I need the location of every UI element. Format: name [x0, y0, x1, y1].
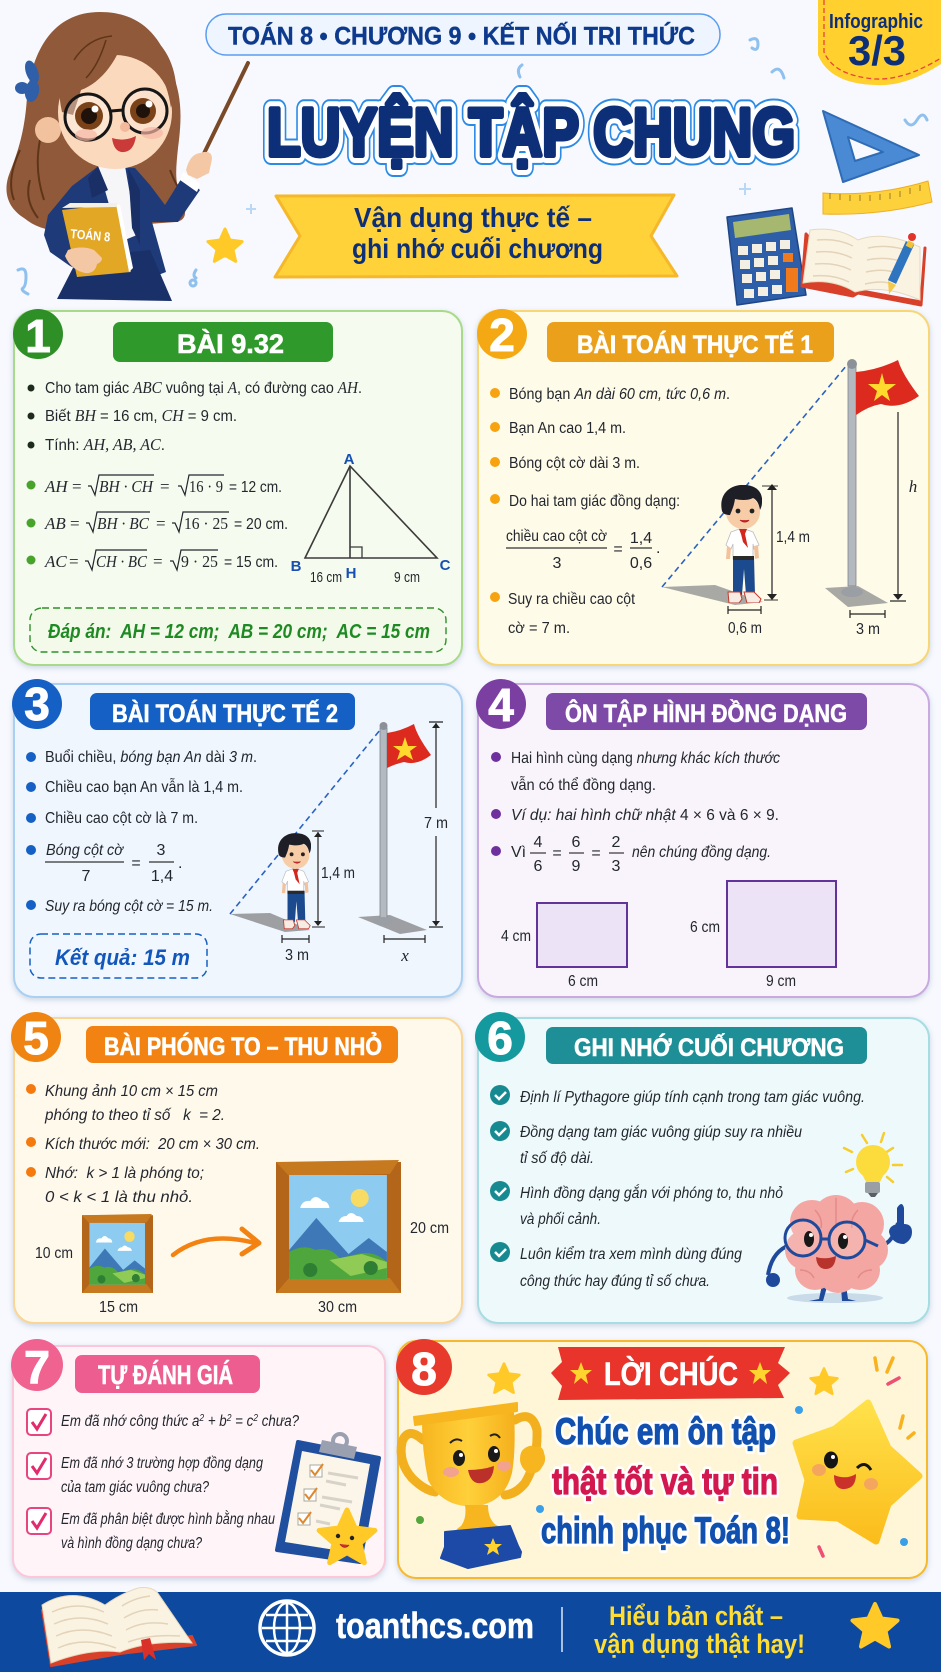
checklist — [490, 1085, 865, 1290]
rectangle 4 × 6: 6 cm — [568, 973, 598, 990]
result box: Kết quả: 15 m — [55, 945, 190, 970]
panel 2: Bài toán thực tế 1 — [477, 309, 929, 665]
panel 3: Bài toán thực tế 2 — [12, 678, 462, 997]
diagram: boy, flagpole and shadows: 1,4 m — [776, 529, 810, 546]
icon: light bulb — [844, 1133, 902, 1197]
icon: globe — [260, 1601, 314, 1655]
formulas: 9 · 25 — [181, 552, 218, 571]
checklist: Luôn kiểm tra xem mình dùng đúng — [520, 1245, 742, 1263]
checklist: = c — [231, 1413, 253, 1430]
title: LUYỆN TẬP CHUNG — [267, 94, 795, 170]
heading: TỰ ĐÁNH GIÁ — [98, 1359, 233, 1390]
checklist: và hình đồng dạng chưa? — [61, 1535, 202, 1552]
diagram: boy, flagpole and shadows — [230, 722, 448, 965]
triangle ABC: B — [291, 558, 302, 575]
result box — [30, 934, 207, 978]
rectangle 6 × 9: 9 cm — [766, 973, 796, 990]
formulas: = — [153, 552, 163, 571]
subject pill — [206, 14, 720, 55]
text list: = — [613, 541, 623, 558]
panel 1: Bài 9.32 — [13, 309, 462, 665]
icon: open book — [42, 1588, 196, 1666]
checklist: chưa? — [258, 1413, 299, 1430]
ribbon heading — [551, 1347, 790, 1400]
badge 1 — [13, 309, 63, 362]
tagline — [594, 1601, 805, 1659]
checklist: của tam giác vuông chưa? — [61, 1479, 209, 1496]
formulas: = — [156, 514, 166, 533]
icon: clipboard with star — [277, 1434, 379, 1563]
star decoration — [489, 1364, 519, 1393]
badge 1: 1 — [25, 310, 51, 362]
formulas: = — [72, 477, 82, 496]
rectangle 6 × 9: 6 cm — [690, 919, 720, 936]
heading: GHI NHỚ CUỐI CHƯƠNG — [574, 1032, 844, 1062]
formulas: BH · CH — [99, 477, 155, 496]
icon: star — [852, 1604, 898, 1646]
diagram: boy, flagpole and shadows: 0,6 m — [728, 620, 762, 637]
text list: Bóng cột cờ — [46, 842, 124, 859]
wish text: thật tốt và tự tin — [552, 1461, 778, 1502]
checklist: Hình đồng dạng gắn với phóng to, thu nhỏ — [520, 1183, 783, 1202]
illustration: winking star — [796, 1403, 919, 1541]
text list: 4 — [534, 834, 543, 851]
subtitle ribbon: Vận dụng thực tế – — [354, 202, 592, 233]
text list: 7 — [82, 868, 91, 885]
badge 3/3 — [818, 0, 941, 85]
checklist — [27, 1409, 299, 1552]
answer box: Đáp án: AH = 12 cm; AB = 20 cm; AC = 15 cm — [48, 621, 430, 643]
icon: calculator — [727, 208, 806, 305]
icon: open book and pencil — [802, 229, 925, 305]
text list: Chiều cao cột cờ là 7 m. — [45, 810, 198, 827]
small picture frame: 10 cm — [35, 1245, 73, 1262]
problem statement — [28, 378, 362, 454]
rectangle 4 × 6 — [501, 903, 627, 990]
text list: Chiều cao bạn An vẫn là 1,4 m. — [45, 777, 243, 796]
wish text — [541, 1411, 790, 1551]
text list — [26, 1083, 260, 1206]
badge 3 — [12, 678, 62, 730]
text list: . — [656, 540, 660, 557]
triangle ABC: C — [440, 557, 451, 574]
ribbon heading: LỜI CHÚC — [604, 1356, 738, 1392]
formulas: 16 · 25 — [184, 514, 228, 533]
badge 6: 6 — [487, 1012, 513, 1064]
triangle ABC: 9 cm — [394, 569, 420, 586]
text list: Hai hình cùng dạng nhưng khác kích thước — [511, 750, 780, 767]
badge 2 — [477, 309, 527, 361]
panel 5: Bài phóng to – thu nhỏ — [11, 1012, 462, 1323]
text list: cờ = 7 m. — [508, 620, 570, 637]
heading — [546, 693, 867, 730]
flag — [387, 724, 431, 768]
text list: 2 — [612, 834, 621, 851]
text list: Nhớ: k > 1 là phóng to; — [45, 1165, 204, 1182]
title: LUYỆN TẬP CHUNG — [267, 94, 795, 170]
formulas: = 15 cm. — [224, 554, 278, 571]
flag — [856, 360, 919, 415]
diagram: boy, flagpole and shadows: x — [400, 946, 409, 965]
star decoration — [810, 1368, 838, 1394]
icon: book TOÁN 8: TOÁN 8 — [70, 226, 111, 244]
badge 8: 8 — [411, 1343, 437, 1395]
formulas: AC — [44, 552, 67, 571]
checklist: Định lí Pythagore giúp tính cạnh trong tam giác vuông. — [520, 1089, 865, 1106]
text list — [490, 386, 730, 637]
checklist: Em đã nhớ 3 trường hợp đồng dạng — [61, 1455, 263, 1472]
panel 6: Ghi nhớ cuối chương — [475, 1012, 929, 1323]
badge 5: 5 — [23, 1012, 49, 1064]
badge 3: 3 — [24, 678, 50, 730]
subject pill: TOÁN 8 • CHƯƠNG 9 • KẾT NỐI TRI THỨC — [228, 20, 695, 50]
badge 3/3: 3/3 — [848, 27, 906, 74]
text list: Bóng cột cờ dài 3 m. — [509, 455, 640, 472]
small picture frame — [35, 1214, 153, 1316]
checklist: 2 — [199, 1413, 205, 1424]
illustration: teacher girl with pointer — [6, 12, 248, 301]
heading: BÀI 9.32 — [177, 328, 284, 359]
tagline: Hiểu bản chất – — [609, 1601, 783, 1631]
website: toanthcs.com — [336, 1605, 534, 1646]
text list: = — [131, 855, 141, 872]
heading: BÀI PHÓNG TO – THU NHỎ — [104, 1031, 382, 1061]
text list: vẫn có thể đồng dạng. — [511, 775, 656, 794]
text list: 1,4 — [151, 868, 173, 885]
rectangle 4 × 6: 4 cm — [501, 928, 531, 945]
header — [6, 0, 941, 305]
heading — [86, 1026, 398, 1063]
formulas: BH · BC — [97, 514, 150, 533]
text list: nên chúng đồng dạng. — [632, 844, 771, 861]
formulas: = — [160, 477, 170, 496]
panel 8: Lời chúc — [396, 1339, 927, 1578]
text list — [26, 748, 257, 915]
icon: yellow ruler — [823, 181, 932, 214]
diagram: boy, flagpole and shadows: 3 m — [856, 621, 880, 638]
text list: Khung ảnh 10 cm × 15 cm — [45, 1083, 218, 1100]
checklist: + b — [204, 1413, 227, 1430]
text list: Ví dụ: hai hình chữ nhật 4 × 6 và 6 × 9. — [511, 807, 779, 824]
triangle ABC: 16 cm — [310, 569, 342, 586]
checklist: 2 — [252, 1413, 258, 1424]
formulas: AB — [44, 514, 66, 533]
text list: Suy ra bóng cột cờ = 15 m. — [45, 898, 213, 915]
checklist: và phối cảnh. — [520, 1211, 601, 1228]
text list: 3 — [157, 842, 166, 859]
heading — [75, 1355, 260, 1393]
badge 5 — [11, 1012, 61, 1064]
diagram: boy, flagpole and shadows: h — [909, 477, 917, 496]
diagram: boy, flagpole and shadows — [662, 359, 919, 638]
diagram: boy, flagpole and shadows: 1,4 m — [321, 865, 355, 882]
triangle ABC: A — [344, 451, 355, 468]
checklist: Em đã nhớ công thức a — [61, 1413, 222, 1430]
heading: BÀI TOÁN THỰC TẾ 2 — [112, 699, 338, 728]
checklist: Đồng dạng tam giác vuông giúp suy ra nhiều — [520, 1124, 802, 1141]
large picture frame: 30 cm — [318, 1299, 357, 1316]
small picture frame: 15 cm — [99, 1299, 138, 1316]
large picture frame — [276, 1160, 449, 1316]
diagram: boy, flagpole and shadows: 7 m — [424, 815, 448, 832]
text list: 9 — [572, 858, 581, 875]
formulas — [26, 475, 288, 571]
subtitle ribbon: ghi nhớ cuối chương — [352, 233, 603, 264]
wish text: Chúc em ôn tập — [555, 1411, 776, 1452]
badge 7: 7 — [24, 1341, 50, 1393]
heading — [546, 1027, 867, 1064]
icon: set square — [823, 111, 919, 182]
text list: Buổi chiều, bóng bạn An dài 3 m. — [45, 748, 257, 766]
large picture frame: 20 cm — [410, 1220, 449, 1237]
badge 7 — [11, 1339, 63, 1393]
checklist: tỉ số độ dài. — [520, 1150, 594, 1167]
badge 4 — [476, 679, 526, 731]
confetti — [416, 1358, 914, 1556]
arrow — [173, 1229, 259, 1255]
illustration: brain mascot — [766, 1195, 912, 1303]
panel 4: Ôn tập hình đồng dạng — [476, 679, 929, 997]
badge 4: 4 — [488, 679, 514, 731]
triangle ABC — [291, 451, 451, 586]
checklist: công thức hay đúng tỉ số chưa. — [520, 1273, 710, 1290]
text list: 1,4 — [630, 530, 652, 547]
text list: 6 — [534, 858, 543, 875]
formulas: = — [70, 514, 80, 533]
text list: Kích thước mới: 20 cm × 30 cm. — [45, 1136, 260, 1153]
wish text: Chúc em ôn tập — [555, 1411, 776, 1452]
heading — [90, 693, 355, 730]
problem statement: Biết BH = 16 cm, CH = 9 cm. — [45, 406, 237, 425]
badge 2: 2 — [489, 309, 515, 361]
star — [208, 229, 242, 261]
wish text: thật tốt và tự tin — [552, 1461, 778, 1502]
formulas: = 20 cm. — [234, 516, 288, 533]
wish text: chinh phục Toán 8! — [541, 1510, 790, 1551]
text list: Suy ra chiều cao cột — [508, 591, 635, 608]
text list: chiều cao cột cờ — [506, 528, 607, 545]
formulas: AH — [44, 477, 69, 496]
badge 3/3: Infographic — [829, 11, 923, 33]
heading: ÔN TẬP HÌNH ĐỒNG DẠNG — [565, 698, 847, 728]
checklist: Em đã phân biệt được hình bằng nhau — [61, 1511, 275, 1528]
text list: 0 < k < 1 là thu nhỏ. — [45, 1189, 193, 1206]
heading — [547, 322, 834, 362]
heading — [113, 322, 333, 362]
text list: 3 — [553, 555, 562, 572]
panel 7: Tự đánh giá — [11, 1339, 385, 1577]
tagline: vận dụng thật hay! — [594, 1629, 805, 1659]
badge 8 — [396, 1339, 452, 1395]
text list: = — [591, 845, 601, 862]
text list: 3 — [612, 858, 621, 875]
subtitle ribbon — [275, 195, 677, 277]
footer band — [0, 1588, 941, 1672]
formulas: 16 · 9 — [189, 477, 223, 496]
badge 6 — [475, 1012, 525, 1064]
triangle ABC: H — [346, 565, 356, 582]
heading: BÀI TOÁN THỰC TẾ 1 — [577, 330, 813, 359]
text list: Do hai tam giác đồng dạng: — [509, 493, 680, 510]
answer box — [30, 608, 446, 652]
formulas: CH · BC — [96, 552, 148, 571]
illustration: trophy mascot — [401, 1403, 545, 1568]
problem statement: Tính: AH, AB, AC. — [45, 435, 165, 454]
text list: Bóng bạn An dài 60 cm, tức 0,6 m. — [509, 386, 730, 403]
wish text: chinh phục Toán 8! — [541, 1510, 790, 1551]
text list: . — [178, 855, 182, 872]
text list: Bạn An cao 1,4 m. — [509, 420, 626, 437]
text list: 6 — [572, 834, 581, 851]
text list: phóng to theo tỉ số k = 2. — [44, 1107, 225, 1124]
text list: Vì — [511, 844, 526, 861]
checklist: 2 — [226, 1413, 232, 1424]
rectangle 6 × 9 — [690, 881, 836, 990]
formulas: = 12 cm. — [229, 479, 282, 496]
title: LUYỆN TẬP CHUNG — [267, 94, 795, 170]
text list: = — [552, 845, 562, 862]
diagram: boy, flagpole and shadows: 3 m — [285, 947, 309, 964]
problem statement: Cho tam giác ABC vuông tại A, có đường cao AH. — [45, 378, 362, 397]
text list: 0,6 — [630, 555, 652, 572]
icon: book TOÁN 8 — [62, 203, 133, 277]
text list — [491, 750, 780, 875]
formulas: = — [69, 552, 79, 571]
